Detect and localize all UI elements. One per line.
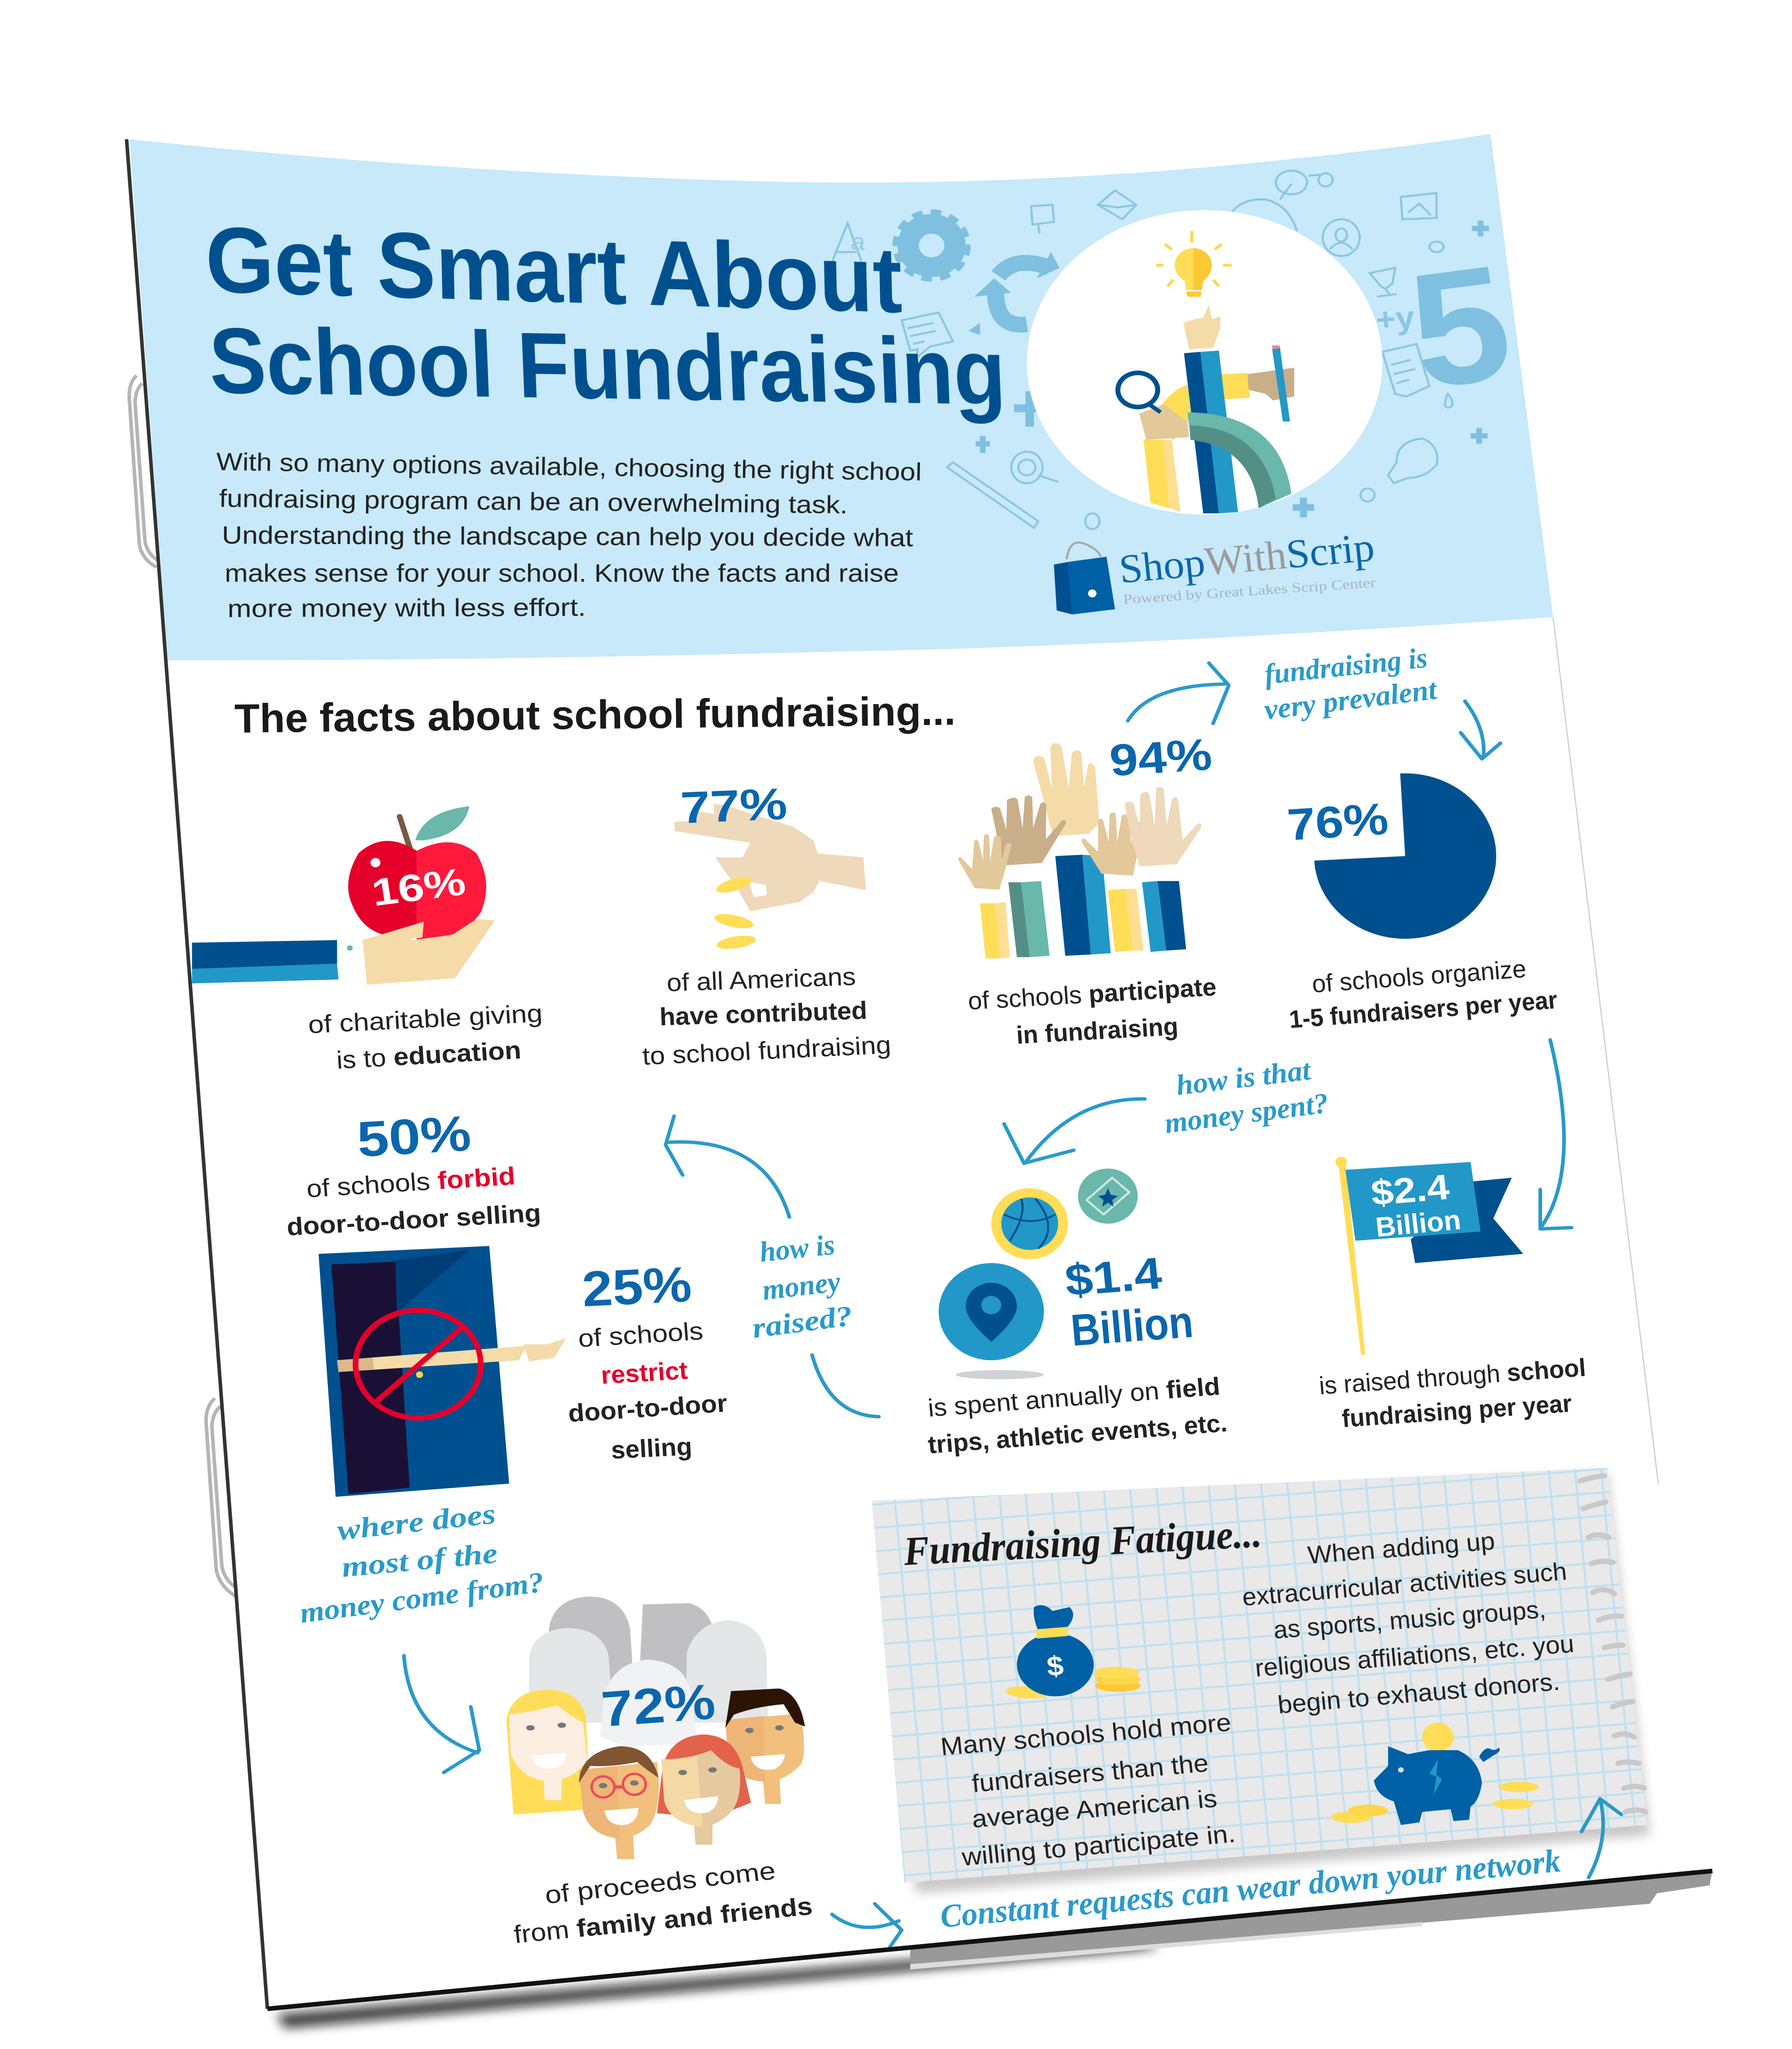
section heading: The facts about school fundraising... <box>234 688 956 741</box>
callout: how is that money spent: money spent? <box>1163 1087 1331 1139</box>
text: right column: as sports, music groups, <box>1272 1595 1547 1644</box>
pie chart <box>1314 773 1496 939</box>
stat: 50% forbid <box>286 1105 542 1241</box>
intro text: makes sense for your school. Know the facts and raise <box>225 560 899 587</box>
header doodles: a <box>850 228 866 255</box>
callout: where does most of the money come from <box>298 1497 546 1629</box>
callout: fundraising is very prevalent <box>1262 642 1440 726</box>
stat: 50% forbid: of schools forbid <box>306 1162 516 1203</box>
callout: how is money raised <box>750 1229 855 1344</box>
bar chart of sleeves <box>980 855 1186 959</box>
stat: $1.4 billion: $1.4 <box>1063 1248 1164 1306</box>
stat: 77% coin hand: 77% <box>679 779 788 833</box>
text: right column <box>1241 1527 1575 1719</box>
icon: red-haired girl <box>657 1734 751 1845</box>
binder clips <box>129 375 238 1597</box>
callout: where does most of the money come from: most of the <box>340 1537 499 1583</box>
arrow: to pie <box>1460 701 1501 759</box>
callout: how is that money spent <box>1163 1054 1331 1139</box>
stat: 94% raised hands bars: 94% <box>1108 729 1214 786</box>
intro text: more money with less effort. <box>227 594 586 622</box>
stat: 50% forbid: door-to-door selling <box>286 1199 542 1241</box>
label: to school fundraising <box>642 1031 892 1070</box>
label: trips, athletic events, etc. <box>927 1409 1228 1459</box>
stat: $1.4 billion <box>927 1168 1228 1459</box>
arrow: up to restrictions <box>665 1116 789 1217</box>
stat: 50% forbid: 50% <box>355 1105 472 1167</box>
label: of schools organize <box>1311 955 1527 998</box>
arrow: from spending <box>812 1355 879 1417</box>
text: right column: religious affiliations, etc. you <box>1254 1630 1575 1682</box>
page shadow <box>277 1871 1713 2029</box>
stat: 25% restrict: 25% <box>581 1256 693 1317</box>
icon: flag <box>1335 1157 1523 1355</box>
intro text: With so many options available, choosing the right school <box>216 448 922 486</box>
stat: 25% restrict: selling <box>610 1433 693 1464</box>
stat: 25% restrict: restrict <box>600 1357 688 1389</box>
icon: apple <box>348 806 486 940</box>
logo <box>1054 525 1376 614</box>
text: right column: extracurricular activities such <box>1241 1558 1568 1611</box>
stat: 16% apple: 16% <box>369 860 468 914</box>
label <box>642 963 892 1070</box>
callout: where does most of the money come from: money come from? <box>298 1566 546 1629</box>
stat: 94% raised hands bars <box>956 729 1217 1049</box>
title <box>204 207 1008 425</box>
stat: 16% apple <box>192 806 543 1074</box>
header doodles <box>829 171 1522 529</box>
label: from family and friends <box>512 1892 814 1949</box>
text: left column: average American is <box>971 1785 1218 1833</box>
stat: $2.4 billion flag <box>1318 1157 1587 1433</box>
logo: Powered by Great Lakes Scrip Center <box>1122 575 1376 607</box>
icon: hand dropping coins <box>674 804 866 951</box>
panel: fundraising fatigue notebook <box>872 1468 1650 1893</box>
intro text: Understanding the landscape can help you decide what <box>222 522 913 552</box>
torn edge <box>1580 1476 1646 1812</box>
stat: 25% restrict: door-to-door <box>567 1390 728 1427</box>
icon: basketball <box>991 1188 1068 1259</box>
icon: blonde girl <box>506 1690 590 1815</box>
stat: 25% restrict: of schools <box>577 1317 704 1353</box>
label: 1-5 fundraisers per year <box>1288 986 1558 1034</box>
panel: fundraising fatigue notebook: Fundraising Fatigue... <box>902 1511 1263 1574</box>
stat: 72% people <box>506 1597 814 1949</box>
stat: 72% people: 72% <box>599 1673 718 1737</box>
text: left column <box>939 1708 1237 1871</box>
text: right column: When adding up <box>1306 1527 1496 1569</box>
icon: light bulb <box>1156 231 1232 297</box>
arrow: to prevalent <box>1128 663 1229 723</box>
icon: shopping bag <box>1054 543 1115 614</box>
arrow: to people <box>404 1656 479 1772</box>
text: left column: fundraisers than the <box>970 1749 1210 1798</box>
icon: money bag: $ <box>1045 1650 1065 1682</box>
label <box>967 973 1217 1049</box>
arrow: to spending <box>1004 1099 1145 1163</box>
icon: cycle arrows <box>974 252 1060 325</box>
icon: broken piggy bank <box>1331 1723 1539 1825</box>
stat: 77% coin hand <box>642 779 892 1070</box>
icon: hand holding apple <box>192 919 495 985</box>
callout: how is money raised: how is <box>758 1229 836 1268</box>
callout: fundraising is very prevalent: very prevalent <box>1262 673 1440 726</box>
label: have contributed <box>659 997 868 1031</box>
label <box>512 1857 814 1949</box>
icon: gear <box>897 214 966 277</box>
text: right column: begin to exhaust donors. <box>1276 1668 1561 1719</box>
icon: dark-haired boy <box>725 1688 805 1804</box>
label: fundraising per year <box>1341 1390 1573 1433</box>
callout: constant requests: Constant requests can wear down your network <box>938 1843 1563 1935</box>
label: of charitable giving <box>307 1000 543 1039</box>
icon: boy with glasses <box>579 1746 659 1859</box>
stat: 76% pie chart <box>1286 773 1558 1034</box>
label <box>1318 1354 1587 1433</box>
icon: grey crowd <box>529 1597 768 1746</box>
arm: yellow with magnifier <box>1118 345 1294 512</box>
callout: where does most of the money come from: where does <box>335 1497 497 1546</box>
label <box>927 1372 1228 1459</box>
icons: raised hands <box>956 741 1204 890</box>
callout: fundraising is very prevalent: fundraising is <box>1263 642 1429 690</box>
stat: $1.4 billion: Billion <box>1069 1297 1195 1356</box>
label: in fundraising <box>1015 1013 1179 1049</box>
stat: $2.4 billion flag: Billion <box>1374 1204 1462 1243</box>
stat: 25% restrict <box>567 1256 728 1464</box>
icon: ticket <box>1078 1168 1138 1224</box>
arrow: to flag <box>1540 1040 1572 1229</box>
logo: ShopWithScrip <box>1117 525 1376 592</box>
callout: how is money raised: raised? <box>750 1299 855 1344</box>
stat: 76% pie chart: 76% <box>1286 794 1390 850</box>
label: is spent annually on field <box>927 1372 1221 1422</box>
header doodles: +y <box>1374 299 1416 338</box>
text: left column: willing to participate in. <box>960 1820 1237 1871</box>
icon: money bag <box>1005 1605 1140 1700</box>
label: of proceeds come <box>543 1857 777 1909</box>
title: Get Smart About <box>204 207 903 332</box>
label: of all Americans <box>666 963 856 997</box>
callout: how is that money spent: how is that <box>1174 1054 1313 1101</box>
header panel <box>129 134 1553 661</box>
big number 5: 5 <box>1399 230 1522 423</box>
callout: how is money raised: money <box>760 1265 843 1306</box>
intro text: fundraising program can be an overwhelming task. <box>219 485 848 519</box>
label: is raised through school <box>1318 1354 1587 1400</box>
label: is to education <box>336 1036 522 1074</box>
text: left column: Many schools hold more <box>939 1708 1232 1761</box>
label <box>1288 955 1558 1034</box>
arrow: to constant requests <box>832 1904 902 1949</box>
label <box>307 1000 543 1074</box>
arrow: up to notebook <box>1581 1799 1622 1878</box>
hero circle illustration <box>1027 210 1382 515</box>
arm: teal arc <box>1188 412 1291 508</box>
title: School Fundraising <box>207 309 1008 425</box>
intro text <box>216 448 922 622</box>
icon: location pin <box>939 1263 1044 1379</box>
arm: blue sleeve <box>1183 304 1238 513</box>
icon: door with prohibited arm <box>318 1246 566 1497</box>
label: of schools participate <box>967 973 1217 1015</box>
stat: $2.4 billion flag: $2.4 <box>1370 1167 1451 1213</box>
